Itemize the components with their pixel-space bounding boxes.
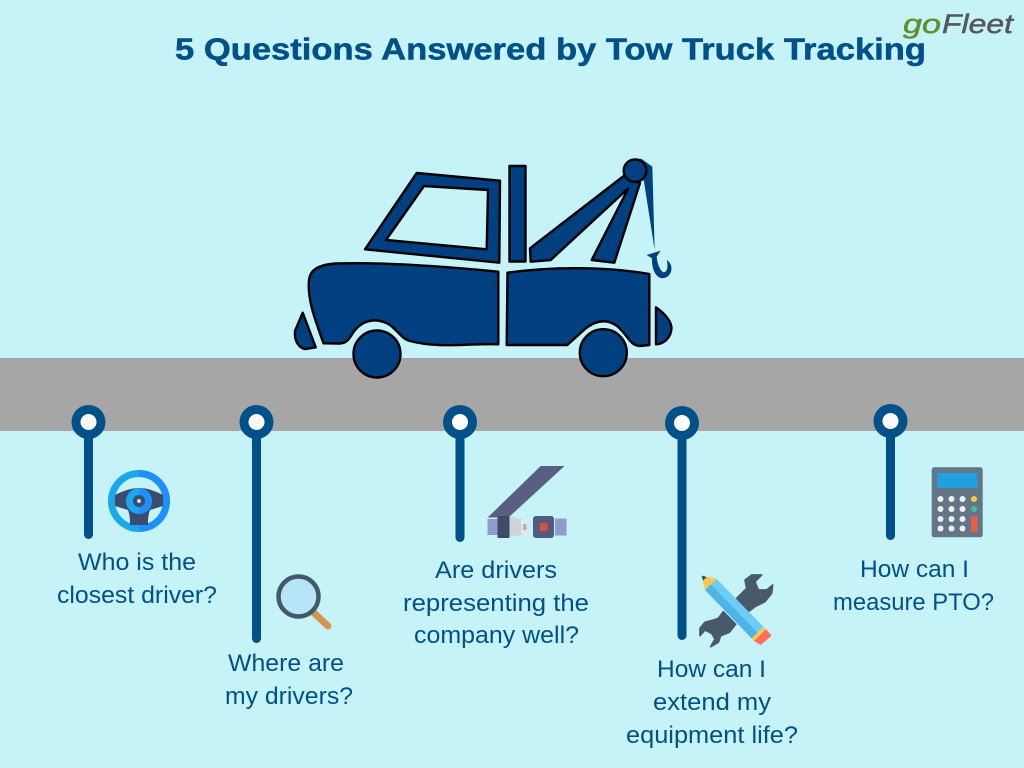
icon: steering wheel	[112, 470, 170, 532]
truck body front	[309, 263, 498, 345]
tow hook	[647, 251, 671, 278]
pin 2	[240, 405, 274, 643]
label: extend equipment life: extend my	[653, 689, 771, 716]
truck post	[510, 166, 526, 262]
icon: seat belt	[488, 466, 566, 538]
tow truck	[295, 158, 672, 378]
label: representing the company: company well?	[414, 622, 579, 649]
icon: magnifier	[278, 576, 328, 626]
pin 1	[72, 405, 106, 539]
label: measure PTO	[833, 556, 994, 616]
icon: calculator	[932, 467, 983, 537]
label: representing the company	[403, 557, 589, 649]
front bumper	[295, 313, 316, 349]
pin 4	[665, 406, 699, 640]
logo: goFleet: go	[903, 9, 941, 39]
label: representing the company: representing the	[403, 590, 589, 617]
label: representing the company: Are drivers	[435, 557, 557, 584]
boom pulley	[624, 159, 646, 182]
label: closest driver	[57, 549, 217, 609]
icon: wrench and pencil	[700, 575, 773, 647]
pin 5	[874, 404, 908, 540]
label: measure PTO: How can I	[860, 556, 969, 583]
label: closest driver: Who is the	[78, 549, 196, 576]
label: extend equipment life	[626, 656, 798, 749]
truck window frame	[365, 173, 500, 263]
label: extend equipment life: equipment life?	[626, 722, 798, 749]
label: closest driver: closest driver?	[57, 582, 217, 609]
front wheel	[354, 330, 400, 378]
tow cable	[635, 158, 655, 250]
rear bumper	[656, 307, 672, 344]
logo: goFleet: Fleet	[942, 9, 1015, 39]
label: where are drivers	[225, 650, 353, 710]
label: extend equipment life: How can I	[657, 656, 766, 683]
label: measure PTO: measure PTO?	[833, 589, 994, 616]
rear wheel	[580, 329, 627, 376]
logo: goFleet	[903, 9, 1015, 39]
tow boom	[530, 175, 640, 263]
title: 5 Questions Answered by Tow Truck Tracking	[175, 32, 926, 66]
truck body rear	[507, 268, 649, 346]
label: where are drivers: Where are	[228, 650, 344, 677]
pin 3	[443, 405, 477, 542]
label: where are drivers: my drivers?	[225, 683, 353, 710]
road	[0, 358, 1024, 431]
